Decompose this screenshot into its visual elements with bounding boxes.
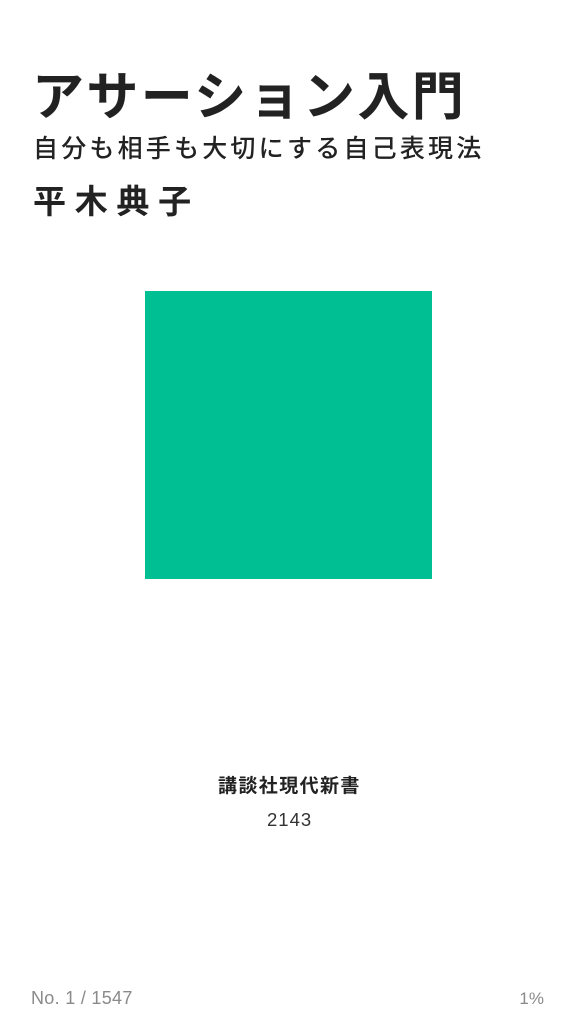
author: 平木典子 xyxy=(33,183,200,220)
publisher series: 講談社現代新書 xyxy=(218,776,361,797)
progress percent: 1% xyxy=(519,989,544,1008)
location indicator: No. 1 / 1547 xyxy=(31,988,133,1008)
series number: 2143 xyxy=(267,809,312,830)
title: アサーション入門 xyxy=(32,69,466,127)
cover image: green square xyxy=(145,291,432,579)
subtitle: 自分も相手も大切にする自己表現法 xyxy=(33,135,484,163)
